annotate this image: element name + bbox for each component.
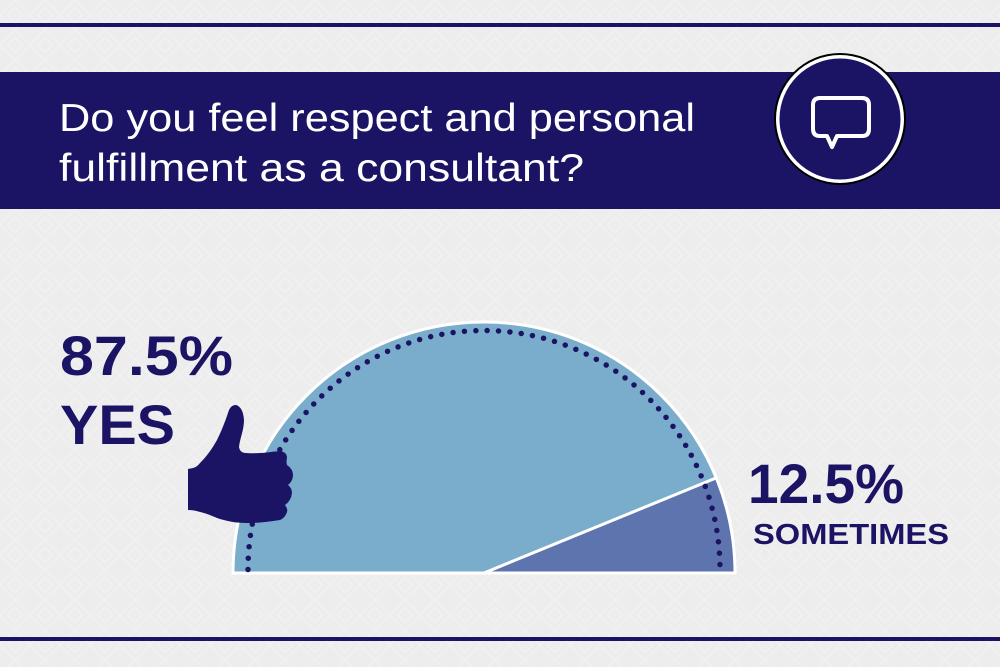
title: Do you feel respect and personal (59, 97, 695, 140)
bottom rule (0, 637, 1000, 641)
title: fulfillment as a consultant? (59, 147, 584, 190)
label: 87.5% yes (60, 324, 233, 456)
header banner (0, 72, 1000, 209)
label: 87.5% yes: 87.5% (60, 324, 233, 387)
icon: thumbs up (188, 405, 293, 523)
segment: sometimes 12.5% (484, 478, 735, 573)
semicircle chart (233, 322, 735, 573)
segment: yes 87.5% (233, 323, 716, 573)
label: 87.5% yes: YES (60, 393, 175, 456)
dotted arc (248, 330, 720, 570)
icon: speech bubble (774, 53, 906, 185)
label: 12.5% sometimes: SOMETIMES (753, 519, 949, 551)
label: 12.5% sometimes: 12.5% (748, 452, 904, 515)
top rule (0, 23, 1000, 27)
chart outline (233, 322, 735, 573)
label: 12.5% sometimes (748, 452, 949, 551)
